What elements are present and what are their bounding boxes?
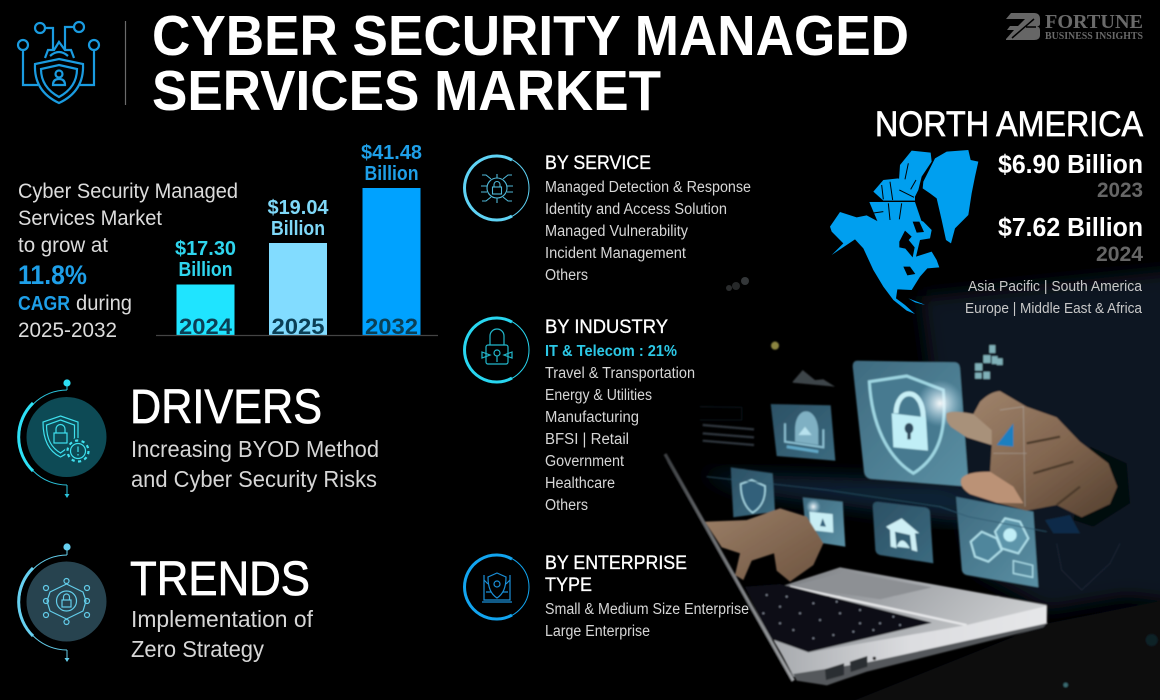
by industry text (545, 316, 695, 514)
title (152, 4, 909, 123)
growth statement (18, 179, 238, 342)
drivers text: Increasing BYOD Method (131, 436, 379, 462)
by service text: Managed Vulnerability (545, 223, 688, 240)
trends text: Zero Strategy (131, 636, 264, 662)
bar 2032: $41.48 (361, 141, 422, 164)
regional figures (875, 104, 1143, 317)
laptop screen back and edge (665, 454, 793, 700)
bar 2025: 2025 (272, 314, 324, 339)
Caribbean islands (908, 298, 925, 305)
Arctic islands (873, 178, 915, 201)
bar 2025: $19.04 (268, 196, 329, 219)
by enterprise type text: Large Enterprise (545, 623, 650, 640)
panel: cloud upload (771, 404, 835, 461)
drivers text (130, 381, 379, 492)
drivers text: DRIVERS (130, 381, 322, 434)
by industry text: BY INDUSTRY (545, 316, 668, 338)
icon: drivers shield and gear (19, 379, 106, 498)
by industry text: Travel & Transportation (545, 365, 695, 382)
logo: Fortune Business Insights (1006, 11, 1143, 42)
panel: house (873, 502, 933, 563)
drivers text: and Cyber Security Risks (131, 466, 377, 492)
panel: hexagons (956, 497, 1038, 587)
regional figures: 2024 (1096, 243, 1143, 266)
bar 2032 (361, 141, 422, 339)
bar chart (156, 141, 438, 339)
by service text: BY SERVICE (545, 152, 651, 174)
Greenland (923, 150, 978, 243)
by service text: Managed Detection & Response (545, 179, 751, 196)
bokeh dots (726, 277, 749, 291)
mainland (830, 212, 939, 314)
laptop body (745, 567, 1047, 685)
inland gaps (899, 222, 924, 275)
icon: trends network lock (19, 543, 106, 662)
icon: by service (465, 156, 529, 220)
growth statement: 2025-2032 (18, 318, 117, 342)
logo: Fortune Business Insights: BUSINESS INSIGHTS (1045, 31, 1143, 42)
data tiles and faint cloud (700, 342, 1158, 687)
by enterprise type text: Small & Medium Size Enterprise (545, 601, 749, 618)
map: North America (830, 150, 978, 314)
bar 2024 (175, 237, 236, 339)
by enterprise type text (545, 552, 749, 640)
hero image: laptop with security panels and hands (665, 270, 1160, 700)
icon: by enterprise type (465, 555, 529, 619)
by industry text: IT & Telecom : 21% (545, 343, 677, 360)
Ellesmere Island (898, 151, 932, 197)
by industry text: Energy & Utilities (545, 387, 652, 404)
regional figures: Asia Pacific | South America (968, 279, 1143, 295)
bar 2032: Billion (364, 163, 418, 185)
trends text: Implementation of (131, 606, 313, 632)
by industry text: Manufacturing (545, 409, 639, 426)
by industry text: BFSI | Retail (545, 431, 629, 448)
growth statement: Services Market (18, 206, 162, 230)
channels between islands (871, 163, 916, 220)
regional figures: $7.62 Billion (998, 214, 1143, 242)
bar 2024: 2024 (179, 314, 233, 339)
by industry text: Others (545, 497, 588, 514)
icon: by industry (465, 318, 529, 382)
bar 2025 (268, 196, 329, 339)
growth statement: to grow at (18, 233, 108, 257)
by service text: Others (545, 267, 588, 284)
title: SERVICES MARKET (152, 59, 661, 123)
panel: browser window (803, 497, 845, 547)
by industry text: Government (545, 453, 625, 470)
bar 2024: Billion (178, 259, 232, 281)
regional figures: 2023 (1097, 179, 1143, 202)
by service text: Identity and Access Solution (545, 201, 727, 218)
growth statement: CAGR (18, 293, 70, 315)
bar 2024: $17.30 (175, 237, 236, 260)
by industry text: Healthcare (545, 475, 615, 492)
header divider (124, 21, 126, 105)
growth statement: Cyber Security Managed (18, 179, 238, 203)
title: CYBER SECURITY MANAGED (152, 4, 909, 68)
panel: large shield and padlock (853, 361, 969, 487)
pointing hand (946, 391, 1130, 527)
by enterprise type text: BY ENTERPRISE (545, 552, 687, 574)
by service text: Incident Management (545, 245, 687, 262)
growth statement: 11.8% (18, 260, 87, 290)
bar 2025: Billion (271, 218, 325, 240)
regional figures: $6.90 Billion (998, 151, 1143, 179)
growth statement: during (76, 291, 132, 315)
trends text (130, 553, 313, 662)
by service text (545, 152, 751, 284)
trends text: TRENDS (130, 553, 310, 606)
by enterprise type text: TYPE (545, 574, 592, 596)
header icon: shield with circuit nodes (18, 22, 99, 103)
logo: Fortune Business Insights: FORTUNE (1045, 11, 1143, 33)
typing hand (705, 508, 823, 582)
panel: small shield (731, 467, 775, 517)
bar 2032: 2032 (365, 314, 418, 339)
regional figures: Europe | Middle East & Africa (965, 301, 1143, 317)
